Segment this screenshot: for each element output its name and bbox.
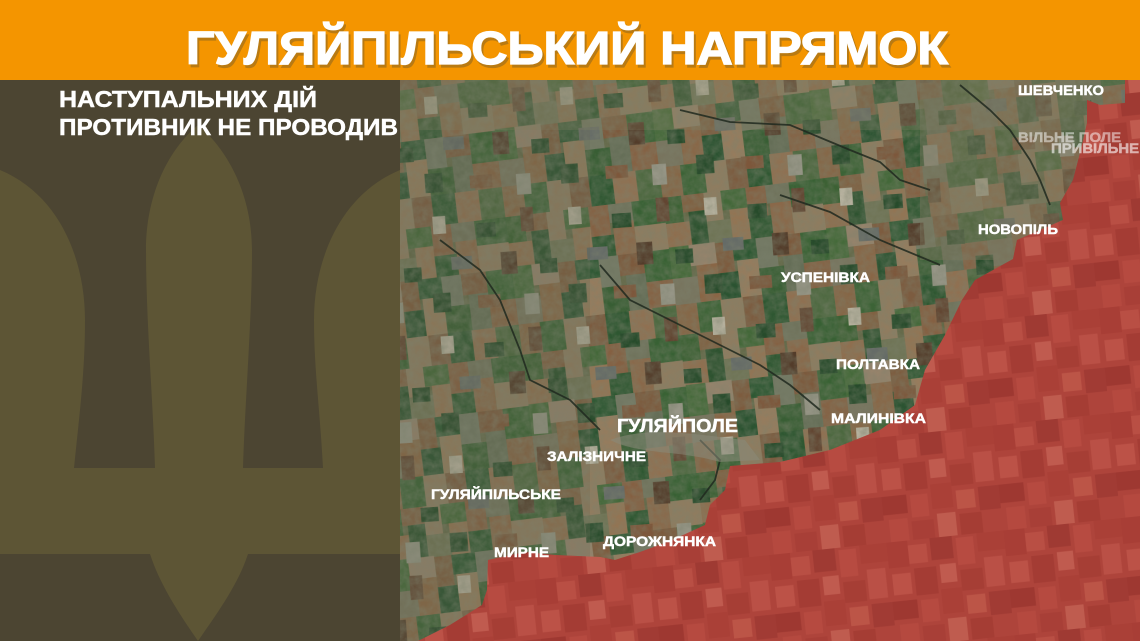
text: no offensive actions note: ПРОТИВНИК НЕ ПРОВОДИВ xyxy=(59,114,398,140)
map: settlement of Huliaipole xyxy=(610,432,760,462)
text: no offensive actions note xyxy=(59,85,398,140)
label: Вільне Поле: ВІЛЬНЕ ПОЛЕ xyxy=(1018,129,1121,145)
text: settlement labels xyxy=(431,82,1139,560)
label: Гуляйпільське: ГУЛЯЙПІЛЬСЬКЕ xyxy=(431,485,561,502)
header banner xyxy=(0,0,1140,80)
panel: left info panel with trident emblem xyxy=(0,80,400,641)
label: Полтавка: ПОЛТАВКА xyxy=(836,356,920,372)
map: occupied territory in red xyxy=(418,80,1140,641)
label: Мирне: МИРНЕ xyxy=(494,544,549,560)
panel: satellite map xyxy=(400,80,1140,641)
map: farmland patchwork xyxy=(400,80,1140,641)
text: no offensive actions note: НАСТУПАЛЬНИХ ДІЙ xyxy=(59,85,317,112)
label: Малинівка: МАЛИНІВКА xyxy=(831,410,926,426)
label: Шевченко: ШЕВЧЕНКО xyxy=(1018,82,1104,98)
label: Привільне: ПРИВІЛЬНЕ xyxy=(1051,140,1139,156)
label: Новопіль: НОВОПІЛЬ xyxy=(978,221,1058,237)
label: Успенівка: УСПЕНІВКА xyxy=(781,269,870,285)
title: ГУЛЯЙПІЛЬСЬКИЙ НАПРЯМОК xyxy=(188,25,951,77)
map: gullies and rivers xyxy=(440,85,1050,500)
label: Дорожнянка: ДОРОЖНЯНКА xyxy=(603,533,716,549)
title: ГУЛЯЙПІЛЬСЬКИЙ НАПРЯМОК xyxy=(186,22,949,74)
label: Гуляйполе: ГУЛЯЙПОЛЕ xyxy=(617,415,738,436)
icon: trident emblem xyxy=(0,125,400,641)
label: Залізничне: ЗАЛІЗНИЧНЕ xyxy=(547,448,646,464)
